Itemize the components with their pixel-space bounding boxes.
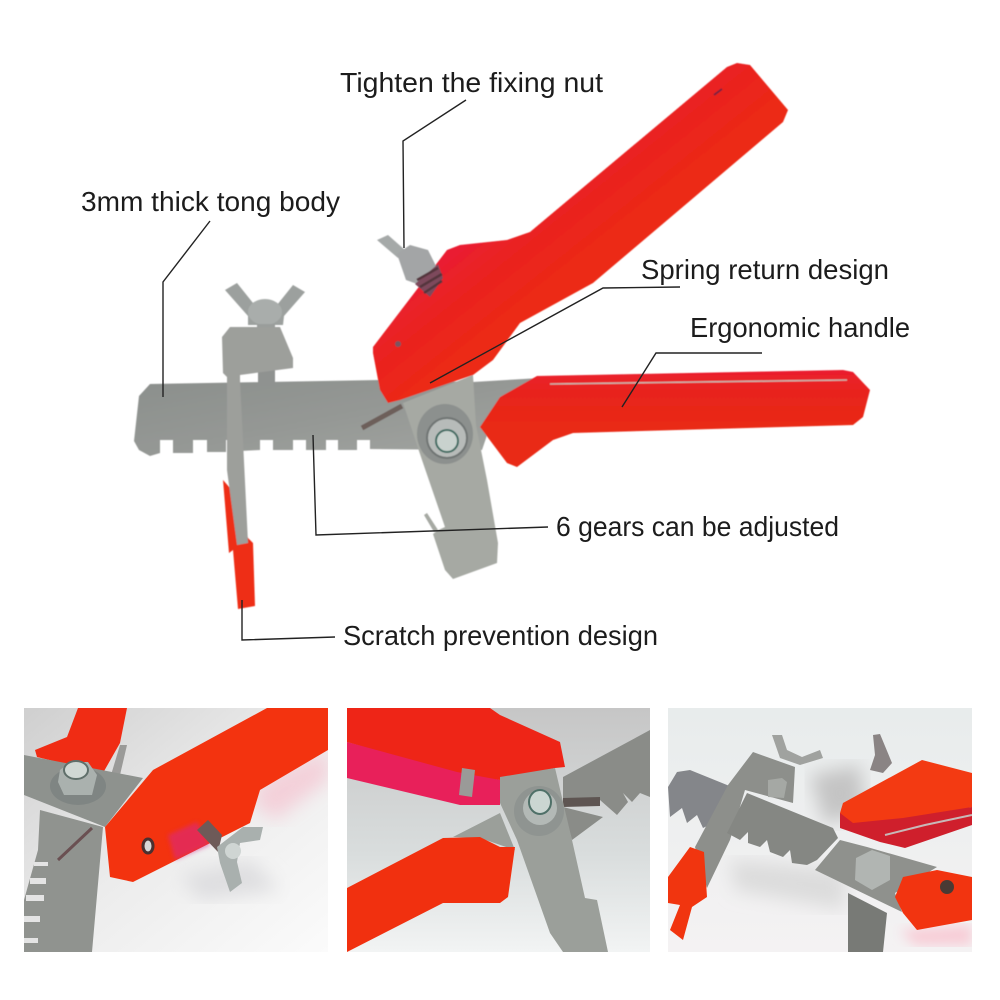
hex bolt xyxy=(855,850,890,890)
magenta shading xyxy=(168,822,210,860)
pivot arm xyxy=(815,840,937,912)
label text: Scratch prevention design xyxy=(343,620,658,651)
upper handle pin xyxy=(870,734,892,773)
label text: Tighten the fixing nut xyxy=(340,67,603,98)
leader line xyxy=(163,221,210,397)
label text: Spring return design xyxy=(641,254,889,285)
leader line xyxy=(403,100,466,248)
bar lower piece xyxy=(563,807,603,840)
clamp wing nut xyxy=(225,283,305,386)
soft shadow xyxy=(810,765,865,825)
photo 3: full tool on white surface xyxy=(668,708,972,952)
photo background xyxy=(668,708,972,952)
floor shadow xyxy=(730,860,845,910)
pink reflection xyxy=(250,750,328,820)
photo background xyxy=(24,708,328,952)
clamp bolt xyxy=(768,778,787,798)
pin at bar xyxy=(563,797,600,807)
inner dark red xyxy=(840,807,972,848)
label: 6 gears can be adjusted xyxy=(313,435,839,542)
pivot nut xyxy=(514,786,564,836)
return spring xyxy=(362,406,402,428)
fixing nut and spring xyxy=(377,235,443,297)
spring wire xyxy=(58,828,92,860)
lower jaw xyxy=(848,893,887,952)
vertical toothed bar xyxy=(24,810,103,952)
leader line xyxy=(242,600,335,640)
photo 1: handle and fixing nut close-up xyxy=(24,708,328,952)
lower handle xyxy=(480,370,870,467)
red scratch cap xyxy=(668,847,707,940)
screw hole xyxy=(143,839,153,853)
red scratch prevention cap xyxy=(223,480,255,609)
leader line xyxy=(313,435,548,535)
pin xyxy=(459,768,475,797)
photo 2: pivot and jaw close-up xyxy=(347,708,650,952)
horizontal jaw xyxy=(24,755,143,827)
label: Spring return design xyxy=(430,254,889,383)
wing nut and spring xyxy=(197,820,263,892)
handle screw xyxy=(940,880,954,894)
label text: 3mm thick tong body xyxy=(81,186,340,217)
rear pin xyxy=(111,745,127,775)
floor shadow xyxy=(188,861,272,900)
upper red handle xyxy=(347,708,565,780)
handle top screw hole xyxy=(714,89,722,95)
main product: tile leveling pliers xyxy=(134,63,870,609)
tooth slots xyxy=(24,862,48,943)
label: Ergonomic handle xyxy=(622,312,910,407)
leader line xyxy=(430,287,680,383)
label text: Ergonomic handle xyxy=(690,312,910,343)
L-shaped clamp xyxy=(222,327,293,545)
lower red handle xyxy=(895,870,972,930)
pivot nut xyxy=(417,404,473,464)
toothed arm xyxy=(727,793,838,865)
toothed left part xyxy=(668,770,732,828)
pink reflection xyxy=(900,925,972,945)
handle lower screw hole xyxy=(395,341,401,347)
magenta lower band xyxy=(347,742,500,805)
label: Tighten the fixing nut xyxy=(340,67,603,248)
label text: 6 gears can be adjusted xyxy=(556,511,839,542)
leader line xyxy=(622,353,762,407)
tong body with adjustment teeth xyxy=(134,378,540,456)
spring wire xyxy=(885,815,972,835)
upper red handle xyxy=(840,760,972,823)
main red handle xyxy=(105,708,328,882)
jaw xyxy=(500,768,608,952)
rear handle xyxy=(35,708,127,773)
lower jaw xyxy=(403,375,498,579)
label: 3mm thick tong body xyxy=(81,186,340,397)
pivot nut xyxy=(50,761,106,805)
lower red handle xyxy=(347,837,515,952)
metal strip behind handle xyxy=(453,813,515,850)
upper handle xyxy=(373,63,788,403)
lower handle highlight line xyxy=(550,380,847,384)
wing nut xyxy=(772,735,823,765)
toothed bar xyxy=(563,730,650,815)
clamp plate xyxy=(695,752,795,888)
photo background xyxy=(347,708,650,952)
label: Scratch prevention design xyxy=(242,600,658,651)
